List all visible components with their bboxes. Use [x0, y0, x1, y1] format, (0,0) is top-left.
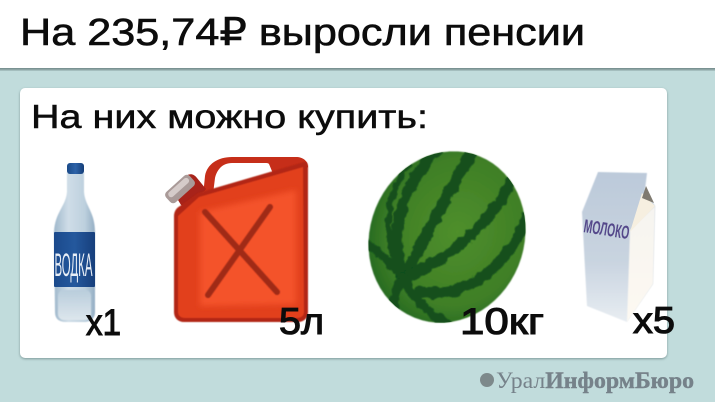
- quantity label: x1: x1: [86, 302, 121, 343]
- quantity label: 10kg: 10кг: [460, 301, 544, 342]
- jerrycan X mark: [205, 207, 277, 295]
- icon: vodka bottle: [54, 163, 95, 322]
- carton label text: МОЛОКО: [582, 216, 631, 244]
- bottle label text: ВОДКА: [54, 248, 93, 284]
- title: На 235,74₽ выросли пенсии: [20, 12, 585, 54]
- quantity label: x5: x5: [633, 300, 675, 341]
- header band: [0, 0, 715, 70]
- panel: purchases: [20, 88, 667, 359]
- icon: watermelon: [368, 150, 526, 324]
- icon: red jerrycan: [163, 157, 308, 322]
- watermark logo: УралИнформБюро: [496, 368, 694, 393]
- icon: milk carton: [582, 172, 655, 322]
- quantity label: 5l: 5л: [279, 301, 324, 342]
- subheading: На них можно купить:: [31, 98, 428, 135]
